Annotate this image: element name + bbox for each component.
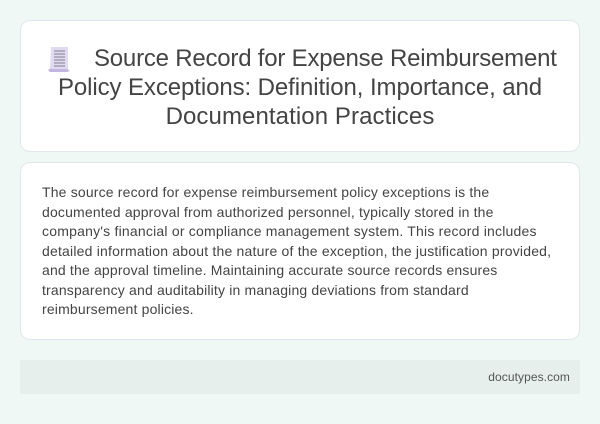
body line 1: The source record for expense reimbursement policy exceptions is the: [42, 184, 489, 200]
footer bar: [20, 360, 580, 394]
icon: paper receipt scroll: [48, 47, 70, 72]
heading line 1: Source Record for Expense Reimbursement: [94, 45, 557, 72]
heading line 3: Documentation Practices: [166, 103, 434, 130]
panel: title card: [20, 20, 580, 152]
footer source text: docutypes.com: [488, 370, 570, 384]
body line 3: company's financial or compliance management system. This record includes: [42, 223, 537, 239]
panel: description card: [20, 162, 580, 340]
heading line 2: Policy Exceptions: Definition, Importance, and: [58, 74, 542, 101]
body line 4: detailed information about the nature of the exception, the justification provided,: [42, 243, 551, 259]
body line 5: and the approval timeline. Maintaining accurate source records ensures: [42, 262, 497, 278]
body line 6: transparency and auditability in managing deviations from standard: [42, 282, 469, 298]
body line 7: reimbursement policies.: [42, 301, 194, 317]
body line 2: documented approval from authorized personnel, typically stored in the: [42, 204, 494, 220]
